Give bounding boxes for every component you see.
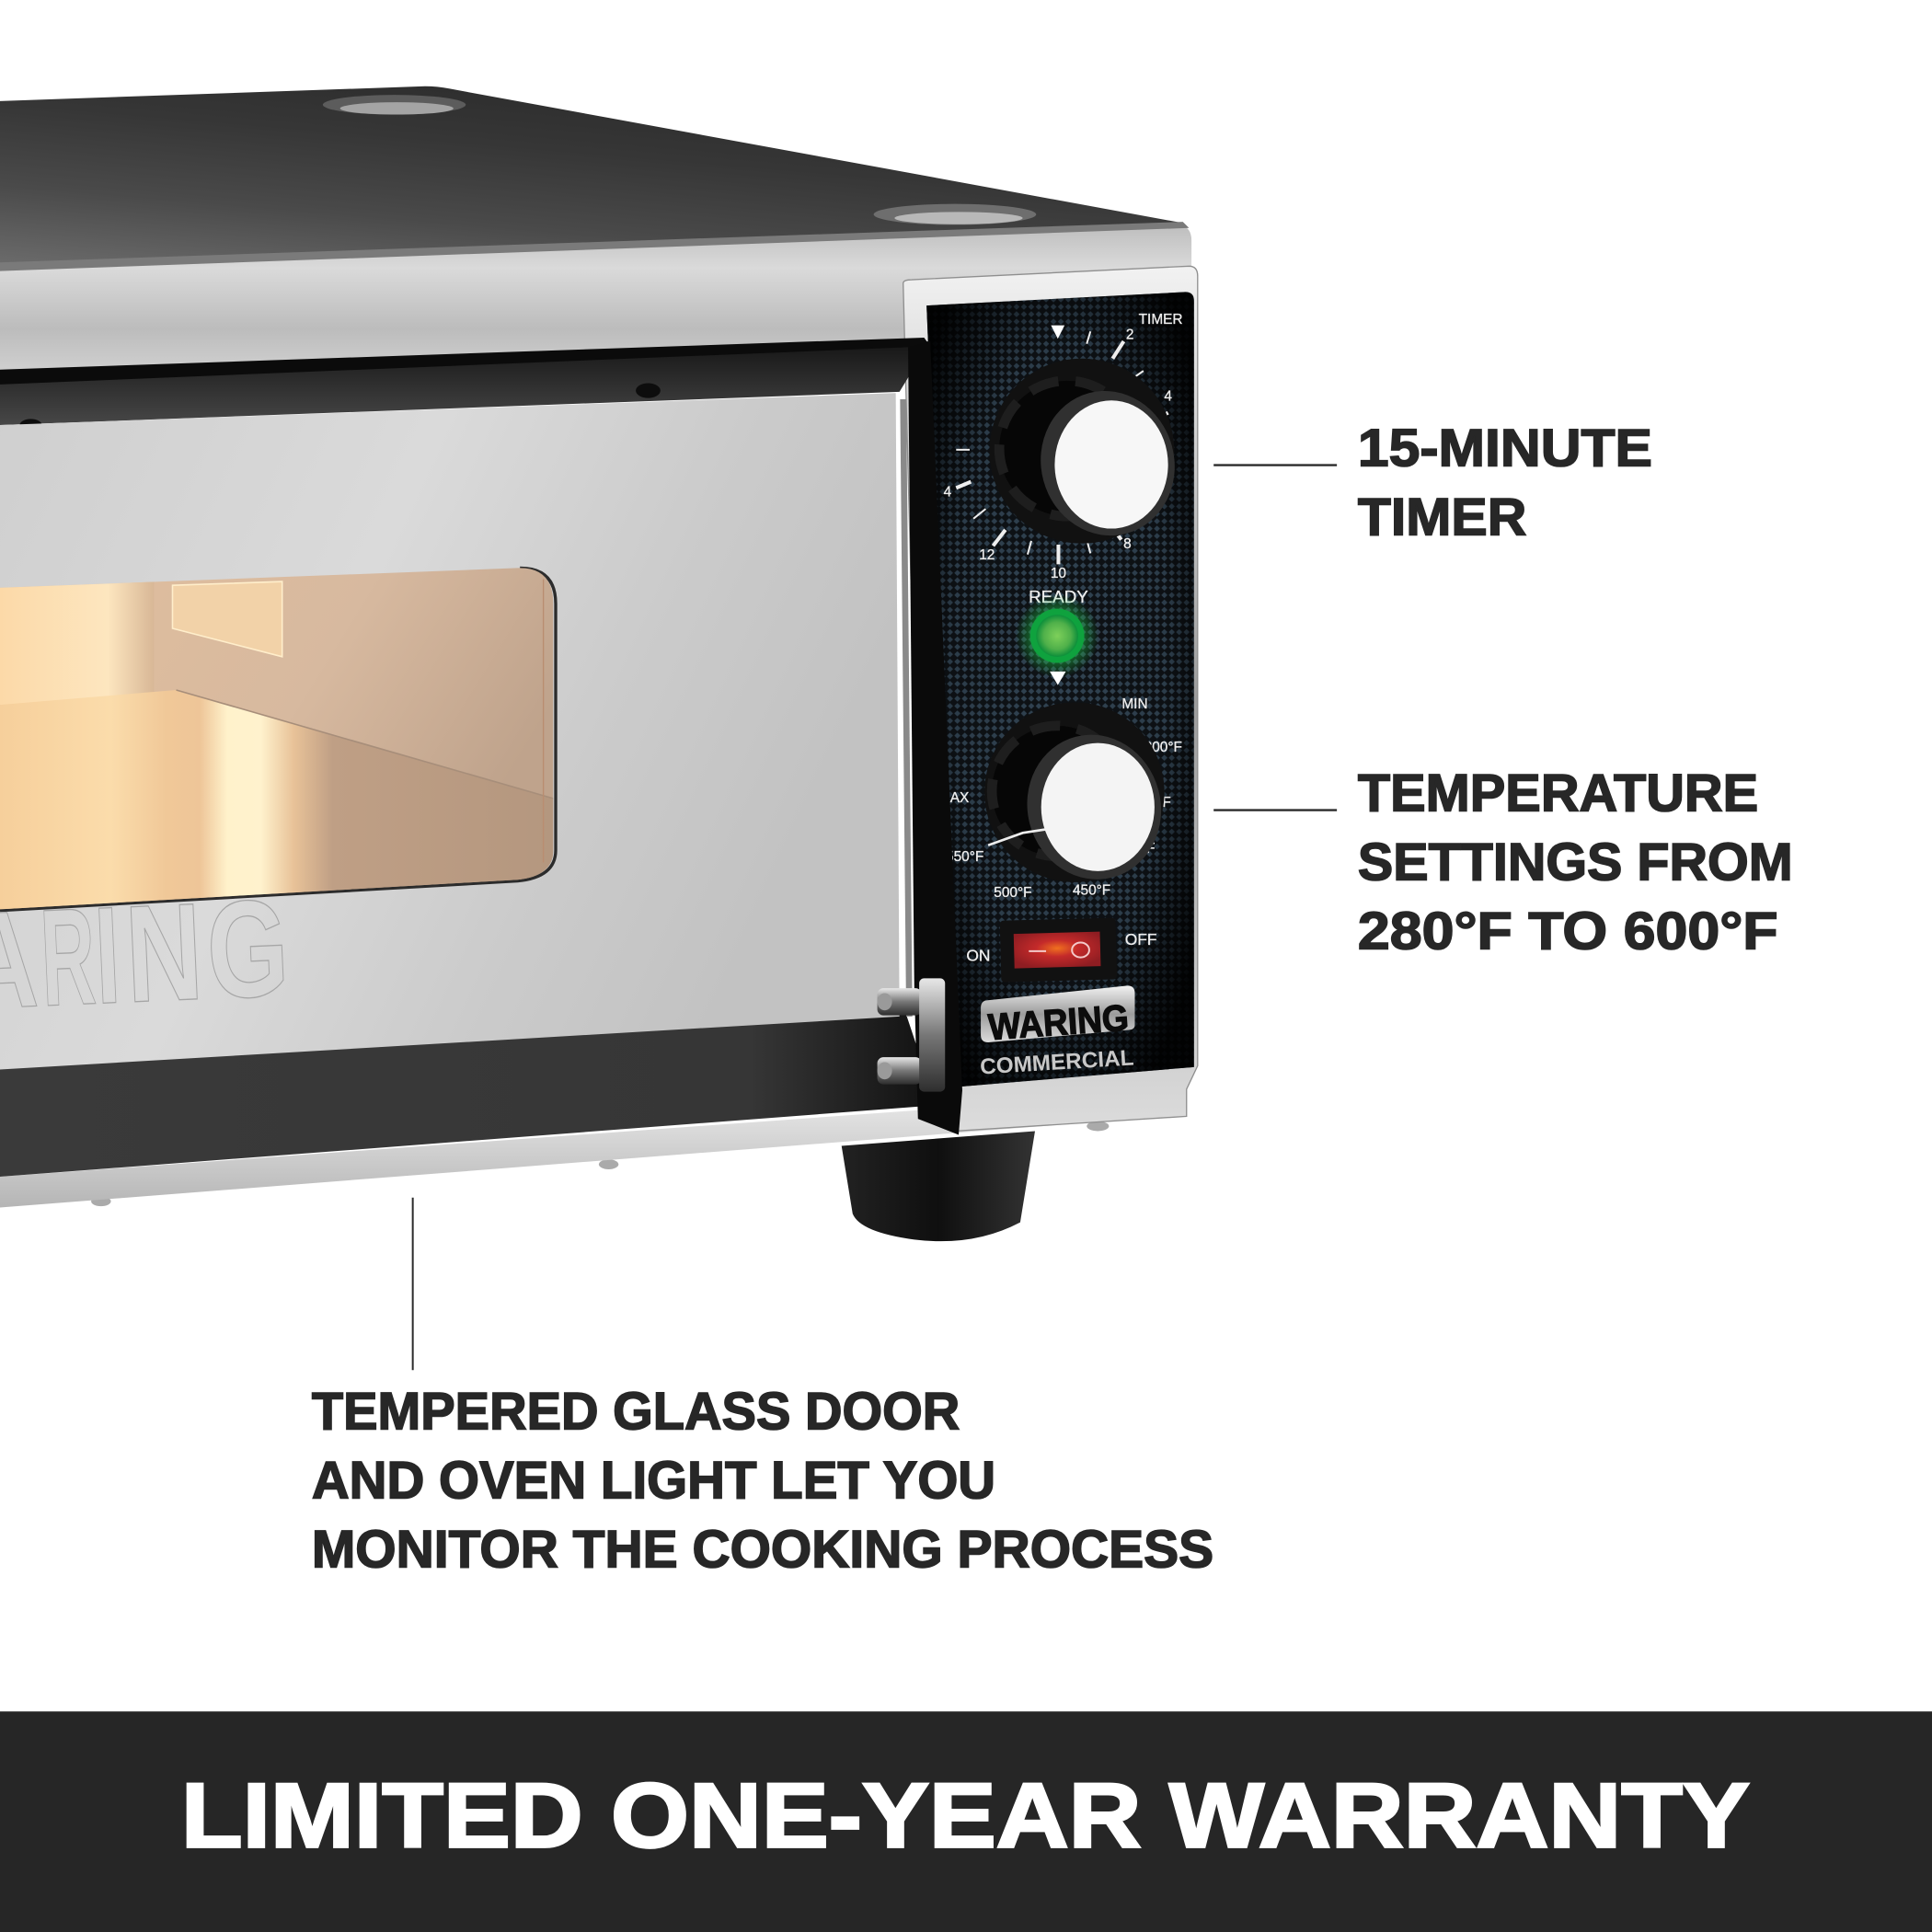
temperature scale: 550°F [946,849,983,865]
brand logo [979,985,1134,1080]
callout: tempered glass door [312,1198,1213,1580]
door hinge frame [908,341,962,1134]
control panel steel frame [903,266,1198,1131]
callout text: MONITOR THE COOKING PROCESS [312,1521,1213,1580]
oven illustration [0,86,1198,1241]
embossed door brand [0,870,292,1039]
timer knob [989,359,1190,551]
temperature scale: 350°F [1133,795,1171,811]
top rim line [0,222,1189,271]
callout text: TIMER [1358,488,1526,546]
callout text: AND OVEN LIGHT LET YOU [312,1452,995,1511]
embossed door brand: R [38,879,98,1035]
brand logo: WARING [987,997,1130,1048]
oven door [0,338,962,1177]
timer scale: TIMER [1139,312,1183,328]
temperature scale [938,696,1182,901]
ready indicator light [1016,587,1099,685]
embossed door brand: G [203,870,292,1028]
timer scale: 4 [1164,388,1172,404]
callout: 15-minute timer [1213,419,1652,546]
temperature scale: 300°F [1144,740,1182,755]
oven top surface with mounting holes [0,86,1183,268]
control panel [926,292,1194,1087]
warranty banner [0,1711,1932,1932]
brand logo: COMMERCIAL [979,1045,1134,1080]
power rocker switch: OFF [1125,930,1157,949]
carbon fibre panel face [926,292,1194,1087]
power rocker switch: ON [966,947,990,965]
callout text: 280°F TO 600°F [1358,902,1778,960]
embossed door brand: I [92,878,123,1033]
door bottom black band [0,1013,937,1177]
timer scale: 4 [944,485,952,500]
banner background [0,1711,1932,1932]
leader line [412,1198,414,1370]
temperature scale: 450°F [1073,882,1110,898]
leader line [1213,810,1337,811]
frame screws [19,419,42,431]
callout text: 15-MINUTE [1358,419,1652,477]
timer scale: 8 [1123,536,1132,552]
oven steel body band [0,224,1191,370]
temperature scale: MIN [1121,696,1148,712]
foot [842,1131,1035,1241]
door hinge hardware [878,978,945,1092]
timer scale: 2 [1126,327,1133,342]
door upper frame [0,341,930,425]
lower steel trim with screws [0,1090,1185,1207]
embossed door brand: N [122,874,205,1031]
callout text: SETTINGS FROM [1358,833,1793,891]
oven window [0,560,556,918]
timer scale [944,312,1183,581]
callout: temperature settings [1213,764,1793,960]
callout text: TEMPERATURE [1358,764,1758,822]
timer scale: 10 [1051,566,1066,581]
temperature knob [984,702,1178,894]
temperature scale: 400°F [1117,841,1155,857]
banner text: LIMITED ONE-YEAR WARRANTY [181,1765,1750,1868]
power rocker switch [966,917,1157,983]
leader line [1213,465,1337,466]
callout text: TEMPERED GLASS DOOR [312,1383,960,1442]
timer scale: 12 [979,547,995,563]
door steel face [0,393,900,1069]
ready indicator light: READY [1029,587,1088,606]
temperature scale: 500°F [994,885,1032,901]
temperature scale: MAX [938,790,969,806]
